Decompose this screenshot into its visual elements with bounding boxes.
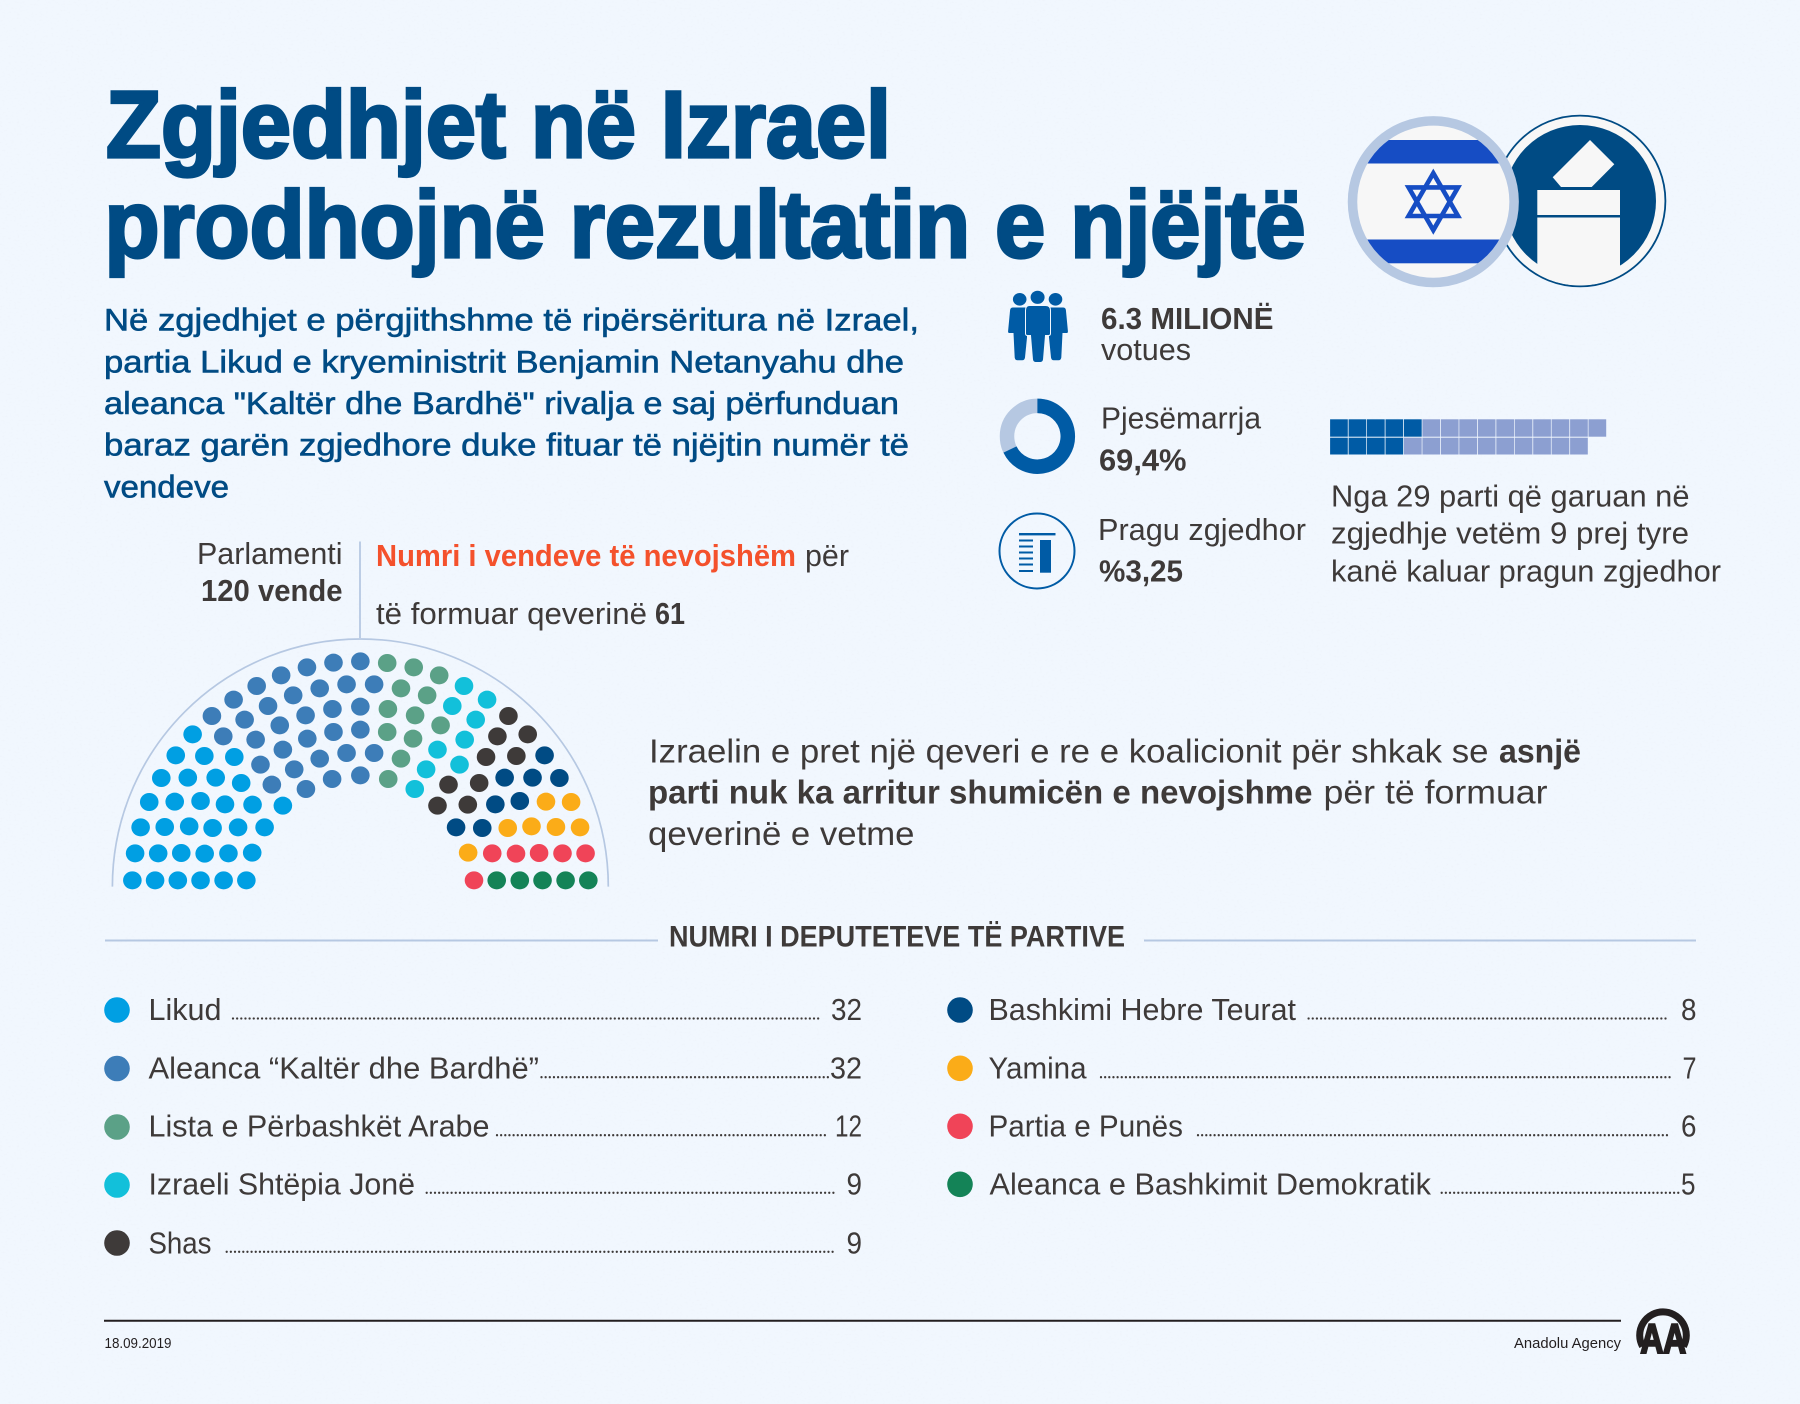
logo: Anadolu Agency: AA [1640, 1316, 1686, 1362]
seats: Likud [123, 725, 292, 889]
icon: Israeli flag and ballot box [1350, 116, 1665, 287]
seats: Shas [428, 707, 537, 815]
intro text: Në zgjedhjet e përgjithshme të ripërsëritura në Izrael, [104, 302, 919, 338]
parliament hemicycle chart [112, 542, 608, 889]
stat: votes: 6.3 MILIONË [1101, 301, 1274, 336]
majority needed label: të formuar qeverinë [376, 596, 647, 631]
text: parties passing threshold: zgjedhje vetëm 9 prej tyre [1331, 515, 1689, 550]
legend row: Shas [104, 1225, 862, 1260]
intro text: aleanca "Kaltër dhe Bardhë" rivalja e saj përfunduan [104, 385, 899, 421]
legend row: Bashkimi Hebre Teurat: Bashkimi Hebre Teurat [988, 992, 1296, 1027]
date: 18.09.2019 [104, 1336, 172, 1352]
icon: Israeli flag [1350, 121, 1520, 282]
party grid: 9 of 29 passed threshold [1330, 419, 1606, 454]
parliament seats label: 120 vende [201, 573, 342, 608]
legend row: Aleanca e Bashkimit Demokratik: 5 [1681, 1166, 1696, 1201]
seats: Aleanca Kaltër dhe Bardhë [203, 652, 383, 798]
agency name: Anadolu Agency [1514, 1336, 1622, 1352]
title: Zgjedhjet në Izrael [106, 72, 891, 178]
legend row: Aleanca e Bashkimit Demokratik: Aleanca e Bashkimit Demokratik [990, 1166, 1431, 1201]
text: coalition explanation: qeverinë e vetme [648, 815, 914, 852]
text: parties passing threshold: Nga 29 parti që garuan në [1331, 479, 1690, 514]
legend row: Lista e Përbashkët Arabe [104, 1109, 862, 1144]
text: coalition explanation: për të formuar [1324, 773, 1548, 810]
majority needed label [376, 538, 849, 631]
legend row: Aleanca Kaltër dhe Bardhë: Aleanca “Kaltër dhe Bardhë” [148, 1051, 539, 1086]
stat: threshold [1000, 512, 1306, 589]
legend row: Yamina: 7 [1682, 1051, 1696, 1086]
legend row: Aleanca Kaltër dhe Bardhë: 32 [830, 1051, 862, 1086]
seats: Izraeli Shtëpia Jonë [405, 677, 496, 798]
legend row: Bashkimi Hebre Teurat: 8 [1681, 992, 1696, 1027]
intro text: vendeve [104, 468, 229, 504]
seats: Yamina [459, 793, 589, 862]
stat: threshold: %3,25 [1099, 554, 1183, 589]
intro text [104, 302, 919, 504]
parliament seats label [197, 536, 342, 608]
stat: turnout: Pjesëmarrja [1101, 400, 1262, 435]
icon: ballot box [1495, 116, 1665, 287]
section heading: party seats: NUMRI I DEPUTETEVE TË PARTIVE [669, 921, 1125, 954]
legend row: Izraeli Shtëpia Jonë: Izraeli Shtëpia Jonë [148, 1166, 415, 1201]
legend row: Lista e Përbashkët Arabe: 12 [835, 1109, 862, 1144]
legend row: Aleanca e Bashkimit Demokratik [947, 1166, 1696, 1201]
legend row: Bashkimi Hebre Teurat [947, 992, 1696, 1027]
stat: turnout: 69,4% [1099, 443, 1186, 478]
legend row: Likud: 32 [831, 992, 862, 1027]
seats: Bashkimi Hebre Teurat [447, 746, 569, 837]
majority needed label: Numri i vendeve të nevojshëm [376, 538, 796, 573]
legend row: Partia e Punës: Partia e Punës [988, 1109, 1183, 1144]
stat: votes [1008, 291, 1274, 367]
legend row: Likud: Likud [148, 992, 222, 1027]
legend row: Yamina [947, 1051, 1696, 1086]
stat: votes: votues [1101, 332, 1191, 367]
legend row: Aleanca Kaltër dhe Bardhë [104, 1051, 862, 1086]
seats: Lista e Përbashkët Arabe [378, 654, 450, 788]
majority needed label: 61 [655, 596, 685, 631]
majority needed label: për [805, 538, 849, 573]
legend row: Likud [104, 992, 862, 1027]
legend row: Partia e Punës: 6 [1681, 1109, 1696, 1144]
text: coalition explanation: Izraelin e pret një qeveri e re e koalicionit për shkak se [649, 733, 1488, 770]
legend row: Shas: 9 [846, 1225, 862, 1260]
legend: left column [104, 992, 862, 1260]
legend: right column [947, 992, 1696, 1201]
legend row: Izraeli Shtëpia Jonë: 9 [846, 1166, 862, 1201]
intro text: partia Likud e kryeministrit Benjamin Netanyahu dhe [104, 344, 904, 380]
title: prodhojnë rezultatin e njëjtë [104, 172, 1306, 278]
seats: Partia e Punës [465, 844, 595, 889]
parliament seats label: Parlamenti [197, 536, 342, 571]
legend row: Partia e Punës [947, 1109, 1696, 1144]
text: parties passing threshold [1331, 479, 1721, 589]
stat: threshold: Pragu zgjedhor [1098, 512, 1306, 547]
intro text: baraz garën zgjedhore duke fituar të njëjtin numër të [104, 427, 909, 463]
icon: people [1008, 291, 1068, 362]
seats: Aleanca e Bashkimit Demokratik [487, 871, 598, 889]
icon: threshold [1000, 514, 1074, 588]
legend row: Yamina: Yamina [988, 1051, 1087, 1086]
legend row: Lista e Përbashkët Arabe: Lista e Përbashkët Arabe [148, 1109, 490, 1144]
title [104, 72, 1306, 278]
legend row: Izraeli Shtëpia Jonë [104, 1166, 862, 1201]
donut chart [1007, 406, 1068, 467]
text: parties passing threshold: kanë kaluar pragun zgjedhor [1331, 554, 1721, 589]
text: coalition explanation [648, 733, 1581, 852]
text: coalition explanation: asnjë [1499, 733, 1581, 770]
footer [104, 1312, 1686, 1362]
legend row: Shas: Shas [148, 1225, 212, 1260]
text: coalition explanation: parti nuk ka arritur shumicën e nevojshme [648, 773, 1312, 810]
stat: turnout [1007, 400, 1262, 478]
